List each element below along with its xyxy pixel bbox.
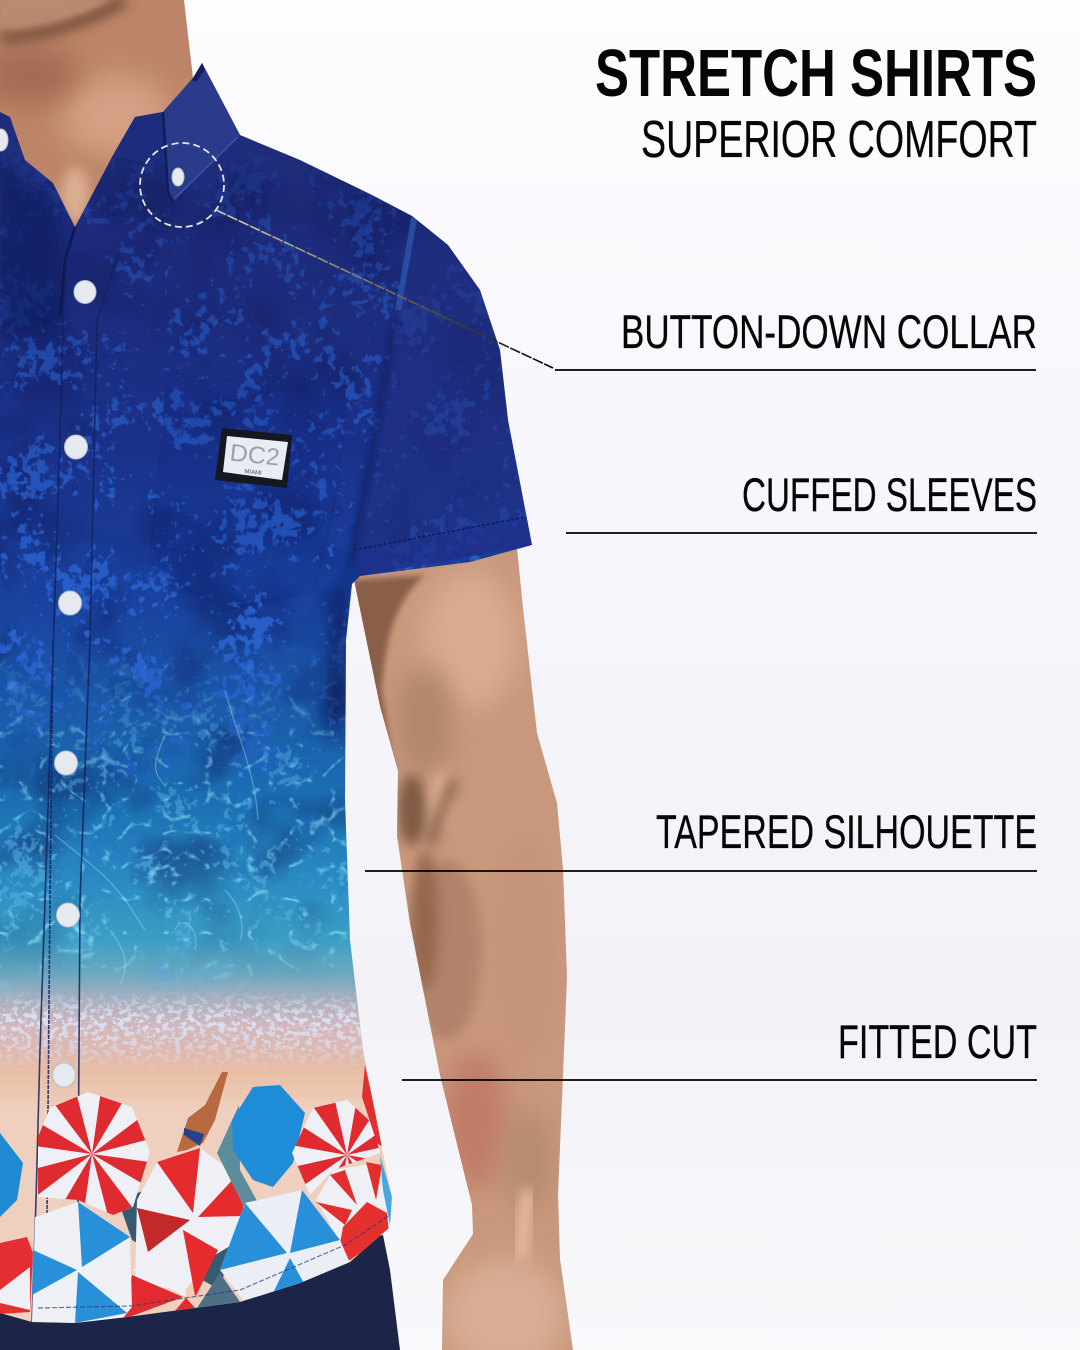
collar leader line bbox=[216, 210, 553, 368]
collar callout circle bbox=[140, 143, 224, 227]
shadow under beach umbrellas bbox=[122, 1192, 229, 1286]
buttons bbox=[0, 129, 184, 1087]
neck and chin bbox=[0, 0, 193, 230]
swimmer figure bbox=[177, 1072, 228, 1152]
red white pinwheel umbrella bbox=[38, 1092, 150, 1215]
big red white umbrella bbox=[135, 1148, 243, 1296]
right collar bbox=[112, 63, 240, 202]
armhole seam highlight bbox=[398, 218, 414, 310]
sleeve cuff stitch bbox=[354, 517, 526, 550]
sleeve overlay bbox=[350, 216, 532, 576]
shirt base gradient bbox=[0, 50, 540, 1340]
white wedge on lower left umbrella bbox=[0, 1267, 30, 1310]
fabric mottling bbox=[0, 50, 540, 990]
water speckle print bbox=[0, 150, 527, 824]
placket lines bbox=[32, 250, 120, 1323]
brand label patch bbox=[215, 428, 292, 488]
water caustics print bbox=[0, 652, 350, 990]
blue umbrella left bbox=[0, 1133, 23, 1217]
shirt bbox=[0, 50, 540, 1340]
brand label patch: DC2 bbox=[229, 440, 281, 472]
blue umbrella centre bbox=[232, 1085, 305, 1187]
arm and hand bbox=[340, 540, 580, 1350]
red umbrella lower left bbox=[0, 1237, 33, 1314]
blue edge right bbox=[380, 1155, 392, 1225]
small pinwheel behind right bbox=[316, 1163, 392, 1260]
armhole shadow bbox=[350, 320, 395, 565]
red white pinwheel umbrella right bbox=[292, 1100, 380, 1195]
blue white umbrella bottom bbox=[197, 1190, 350, 1308]
left placket edge bbox=[60, 227, 75, 317]
caustic veins bbox=[55, 690, 258, 985]
pocket bbox=[149, 373, 348, 610]
underarm shadow bbox=[325, 570, 348, 720]
left shirt shadow bbox=[0, 165, 65, 340]
red strip umbrella edge bbox=[362, 1065, 383, 1147]
red wedges on small pinwheel bbox=[316, 1162, 382, 1225]
blue white placket umbrella bbox=[32, 1202, 132, 1323]
red umbrella small corner bbox=[337, 1202, 389, 1260]
shadow beside blue umbrella bbox=[217, 1105, 257, 1206]
brand label patch: MIAMI bbox=[244, 469, 262, 477]
trousers bbox=[0, 1235, 400, 1350]
hem stitching bbox=[38, 1215, 390, 1308]
umbrella band bbox=[0, 1065, 421, 1323]
sleeve cuff band bbox=[387, 516, 532, 570]
light speckle print bbox=[0, 660, 355, 998]
sea foam bbox=[0, 994, 366, 1067]
bottom red white umbrella bbox=[124, 1230, 200, 1318]
